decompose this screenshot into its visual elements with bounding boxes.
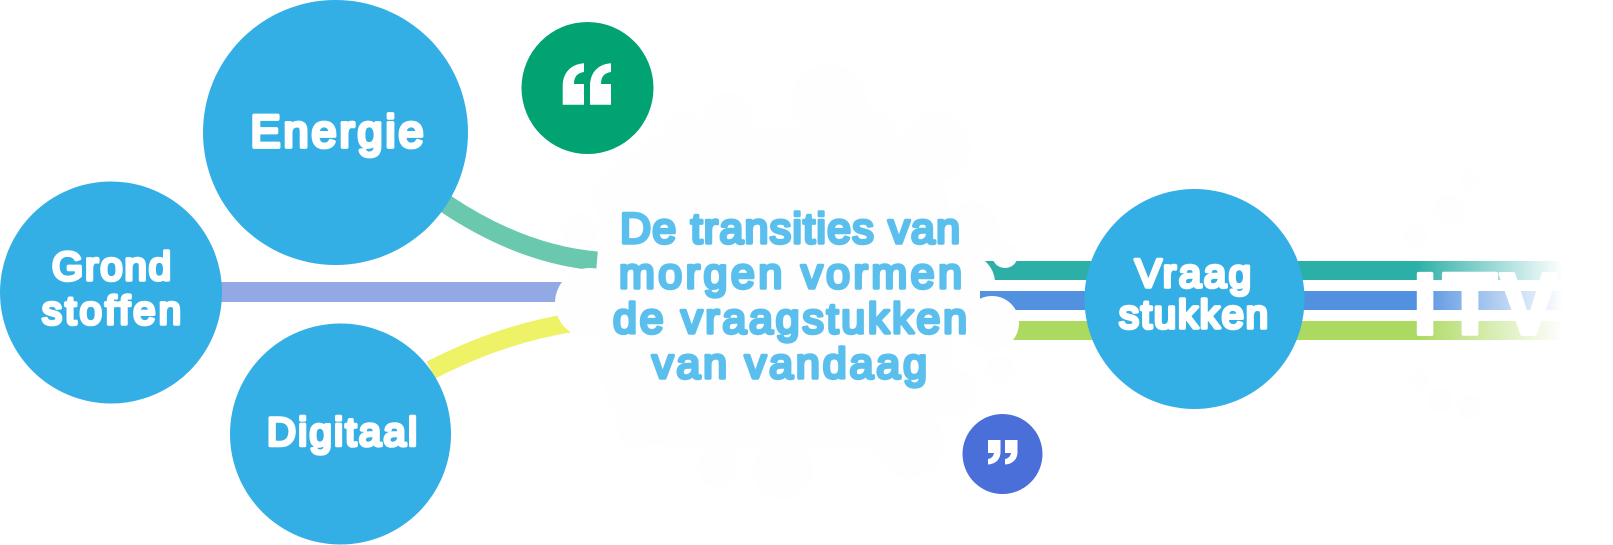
band: green bbox=[990, 321, 1570, 340]
icon: opening quote bbox=[522, 22, 654, 154]
band: blue bbox=[980, 291, 1570, 310]
circle: Grondstoffen: stoffen bbox=[42, 289, 181, 333]
band fade to white bbox=[1415, 255, 1575, 345]
white ITV lettering over the bands: T bbox=[1443, 256, 1497, 353]
white ITV lettering over the bands: I bbox=[1413, 256, 1437, 353]
band: teal bbox=[960, 261, 1570, 280]
central statement: morgen vormen bbox=[619, 250, 962, 298]
circle: Energie: Energie bbox=[250, 106, 424, 157]
faint bubbles on the right bbox=[1403, 170, 1482, 419]
circle: Vraagstukken: Vraag bbox=[1135, 252, 1251, 296]
icon: closing quote bbox=[962, 414, 1042, 494]
central statement bbox=[613, 205, 967, 388]
central statement: De transities van bbox=[620, 205, 960, 253]
connector: Grondstoffen to centre bbox=[200, 282, 580, 302]
circle: Grondstoffen bbox=[0, 182, 222, 404]
circle: Digitaal: Digitaal bbox=[267, 410, 417, 454]
decorative cloud cover, upper right of the centre bbox=[937, 254, 995, 312]
circle: Digitaal bbox=[230, 324, 451, 544]
white ITV lettering over the bands bbox=[1413, 256, 1557, 353]
cloud: central white bubbles behind the text bbox=[555, 64, 1019, 500]
central statement: de vraagstukken bbox=[613, 295, 967, 343]
central statement: van vandaag bbox=[652, 340, 927, 388]
circle: Energie bbox=[203, 0, 468, 265]
connector: Energie to centre bbox=[446, 204, 597, 261]
circle: Grondstoffen: Grond bbox=[52, 245, 171, 289]
circle: Vraagstukken bbox=[1084, 189, 1304, 409]
circle: Vraagstukken: stukken bbox=[1119, 293, 1268, 337]
connector: Digitaal to centre bbox=[431, 322, 575, 370]
white ITV lettering over the bands: V bbox=[1500, 256, 1557, 353]
